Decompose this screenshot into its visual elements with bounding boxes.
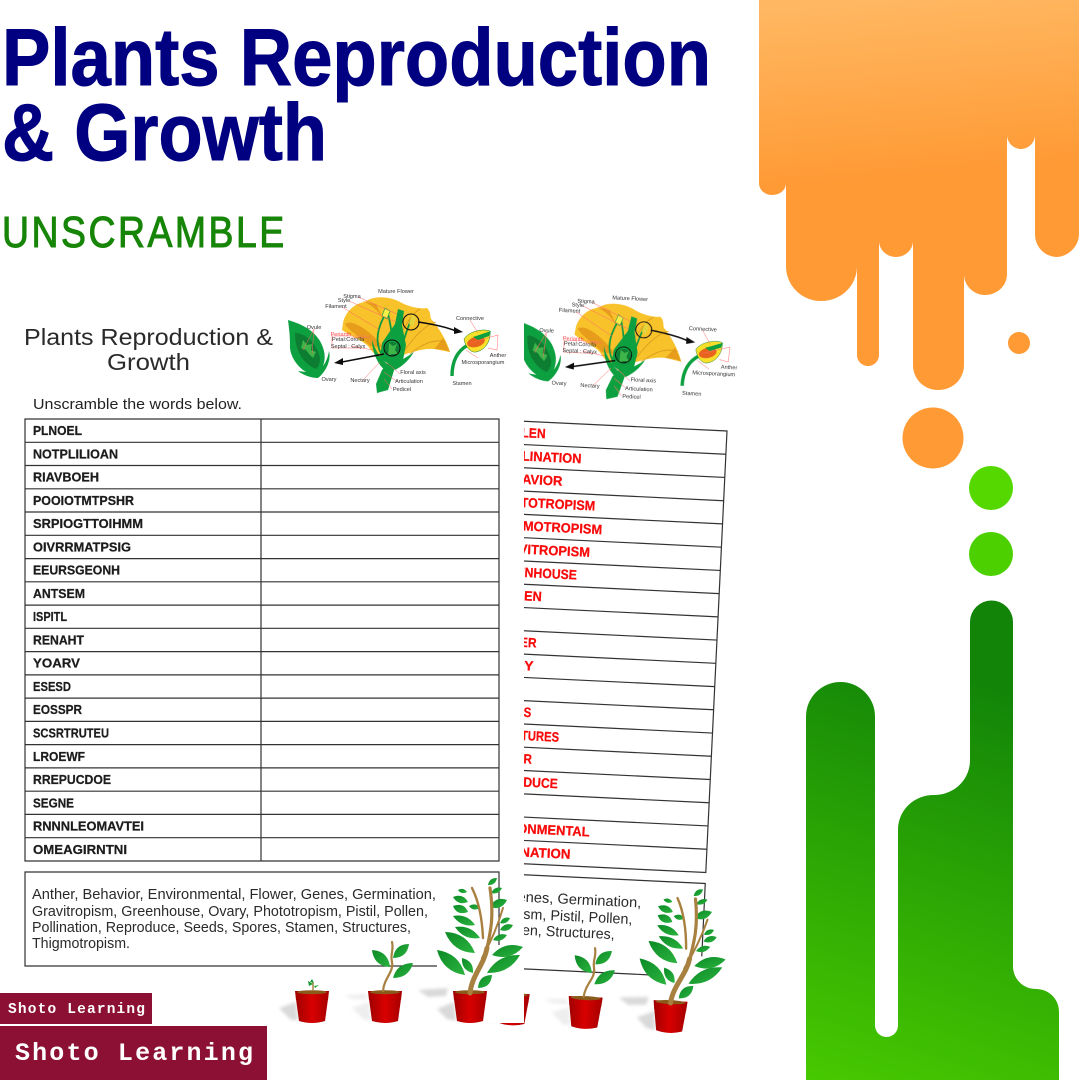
flower diagram: Stigma <box>343 294 362 300</box>
flower diagram: Mature Flower <box>378 289 414 295</box>
flower diagram: Stamen <box>452 381 472 387</box>
orange drop small <box>1008 332 1030 354</box>
word bank: Thigmotropism. <box>32 936 130 952</box>
subtitle: UNSCRAMBLE <box>2 207 284 257</box>
flower diagram: Filament <box>325 304 347 310</box>
answer key words: BEHAVIOR <box>494 470 563 489</box>
answer key table <box>232 408 727 872</box>
small Shoto Learning badge: Shoto Learning <box>8 1002 145 1018</box>
answer key words: THIGMOTROPISM <box>492 517 602 537</box>
answer key flower diagram: Mature Flower <box>612 295 648 303</box>
word bank: Pollination, Reproduce, Seeds, Spores, Stamen, Structures, <box>32 920 411 936</box>
answer key flower diagram: Ovary <box>551 381 567 387</box>
growing plants illustration <box>279 878 523 1023</box>
worksheet instruction: Unscramble the words below. <box>33 396 242 413</box>
answer key words: GREENHOUSE <box>490 563 577 583</box>
small Shoto Learning badge <box>0 993 152 1024</box>
scrambled words: ESESD <box>33 679 71 694</box>
panel: answer key worksheet <box>225 278 757 1035</box>
answer key flower diagram: Pedicel <box>622 394 641 401</box>
scrambled words: SEGNE <box>33 795 74 810</box>
title: & Growth <box>2 88 327 178</box>
flower diagram: Anther <box>490 353 506 359</box>
worksheet heading <box>24 324 273 375</box>
answer key growing plants <box>478 879 729 1035</box>
flower diagram: Microsporangium <box>462 360 505 366</box>
scrambled words: PLNOEL <box>33 423 82 438</box>
answer key words: STRUCTURES <box>482 726 559 745</box>
answer key flower diagram: Petal:Corolla <box>564 341 597 349</box>
scrambled words: EOSSPR <box>33 702 83 717</box>
large Shoto Learning badge <box>0 1026 267 1080</box>
title <box>2 13 711 178</box>
worksheet heading: Growth <box>107 349 190 375</box>
flower diagram: Articulation <box>395 379 423 385</box>
answer key words: ANTHER <box>486 633 537 651</box>
answer key flower diagram: Stigma <box>577 299 596 306</box>
answer key flower diagram: Articulation <box>625 386 653 393</box>
flower diagram: Ovary <box>322 377 337 383</box>
answer key word bank: Gravitropism, Greenhouse, Ovary, Phototropism, Pistil, Pollen, <box>237 893 633 928</box>
answer key words: POLLINATION <box>495 447 582 466</box>
green drop lower <box>969 532 1013 576</box>
answer key words <box>476 424 609 863</box>
flower diagram: Floral axis <box>400 370 426 376</box>
scrambled words table <box>25 419 499 861</box>
answer key flower diagram: Nectary <box>580 383 600 390</box>
flower diagram: Nectary <box>350 378 370 384</box>
flower diagram: Style <box>338 298 350 304</box>
answer key word bank: Anther, Behavior, Environmental, Flower, Genes, Germination, <box>237 876 642 911</box>
scrambled words: LROEWF <box>33 749 85 764</box>
answer key words: POLLEN <box>496 424 546 441</box>
large Shoto Learning badge: Shoto Learning <box>15 1039 253 1068</box>
flower diagram: Septal : Calyx <box>331 344 365 350</box>
answer key flower diagram: Filament <box>559 308 581 315</box>
answer key words: FLOWER <box>481 749 533 767</box>
scrambled words <box>33 423 144 857</box>
scrambled words: YOARV <box>33 656 80 671</box>
answer key words: SPORES <box>483 703 532 720</box>
scrambled words: RNNNLEOMAVTEI <box>33 819 144 834</box>
orange drop large <box>902 408 964 468</box>
answer key words: ENVIRONMENTAL <box>477 819 590 839</box>
answer key flower diagram: Style <box>571 302 584 309</box>
scrambled words: SRPIOGTTOIHMM <box>33 516 143 531</box>
scrambled words: OMEAGIRNTNI <box>33 842 127 857</box>
panel: unscramble worksheet <box>0 280 524 1023</box>
answer key words: GERMINATION <box>476 842 571 862</box>
flower diagram: Perianth <box>331 332 351 338</box>
answer key flower diagram: Stamen <box>682 391 701 398</box>
scrambled words: SCSRTRUTEU <box>33 726 109 740</box>
scrambled words: RIAVBOEH <box>33 470 99 484</box>
answer key flower diagram: Anther <box>721 365 738 371</box>
answer key words: GRAVITROPISM <box>491 540 590 560</box>
answer key words: PHOTOTROPISM <box>493 494 596 514</box>
answer key words: OVARY <box>485 656 534 674</box>
worksheet heading: Plants Reproduction & <box>24 324 273 350</box>
answer key flower diagram: Perianth <box>563 336 584 343</box>
answer key flower diagram: Microsporangium <box>692 370 736 378</box>
flower diagram: Connective <box>456 316 484 322</box>
answer key word bank: Pollination, Reproduce, Seeds, Spores, Stamen, Structures, <box>236 909 615 943</box>
word bank <box>25 872 499 966</box>
green rising shape <box>806 600 1059 1080</box>
scrambled words: ANTSEM <box>33 586 85 601</box>
scrambled words: RREPUCDOE <box>33 772 111 787</box>
word bank: Anther, Behavior, Environmental, Flower, Genes, Germination, <box>32 887 436 903</box>
scrambled words: EEURSGEONH <box>33 563 120 578</box>
orange paint drip <box>759 0 1079 390</box>
answer key flower diagram: Connective <box>689 326 717 333</box>
answer key words: REPRODUCE <box>480 773 558 791</box>
flower diagram: Ovule <box>307 325 321 331</box>
scrambled words: POOIOTMTPSHR <box>33 493 135 508</box>
answer key flower diagram: Floral axis <box>630 377 656 385</box>
scrambled words: ISPITL <box>33 609 67 624</box>
title: Plants Reproduction <box>2 13 711 103</box>
scrambled words: RENAHT <box>33 632 84 647</box>
flower diagram: Pedicel <box>393 387 411 393</box>
answer key flower diagram: Septal : Calyx <box>562 348 597 356</box>
flower diagram: Petal:Corolla <box>332 337 365 343</box>
answer key word bank <box>227 861 705 977</box>
answer key flower diagram <box>517 291 741 405</box>
green drop upper <box>969 466 1013 510</box>
scrambled words: NOTPLILIOAN <box>33 446 118 461</box>
scrambled words: OIVRRMATPSIG <box>33 539 131 554</box>
answer key flower diagram: Ovule <box>539 328 554 335</box>
flower diagram <box>288 289 506 393</box>
word bank: Gravitropism, Greenhouse, Ovary, Phototropism, Pistil, Pollen, <box>32 904 428 920</box>
answer key words: STAMEN <box>489 587 542 604</box>
